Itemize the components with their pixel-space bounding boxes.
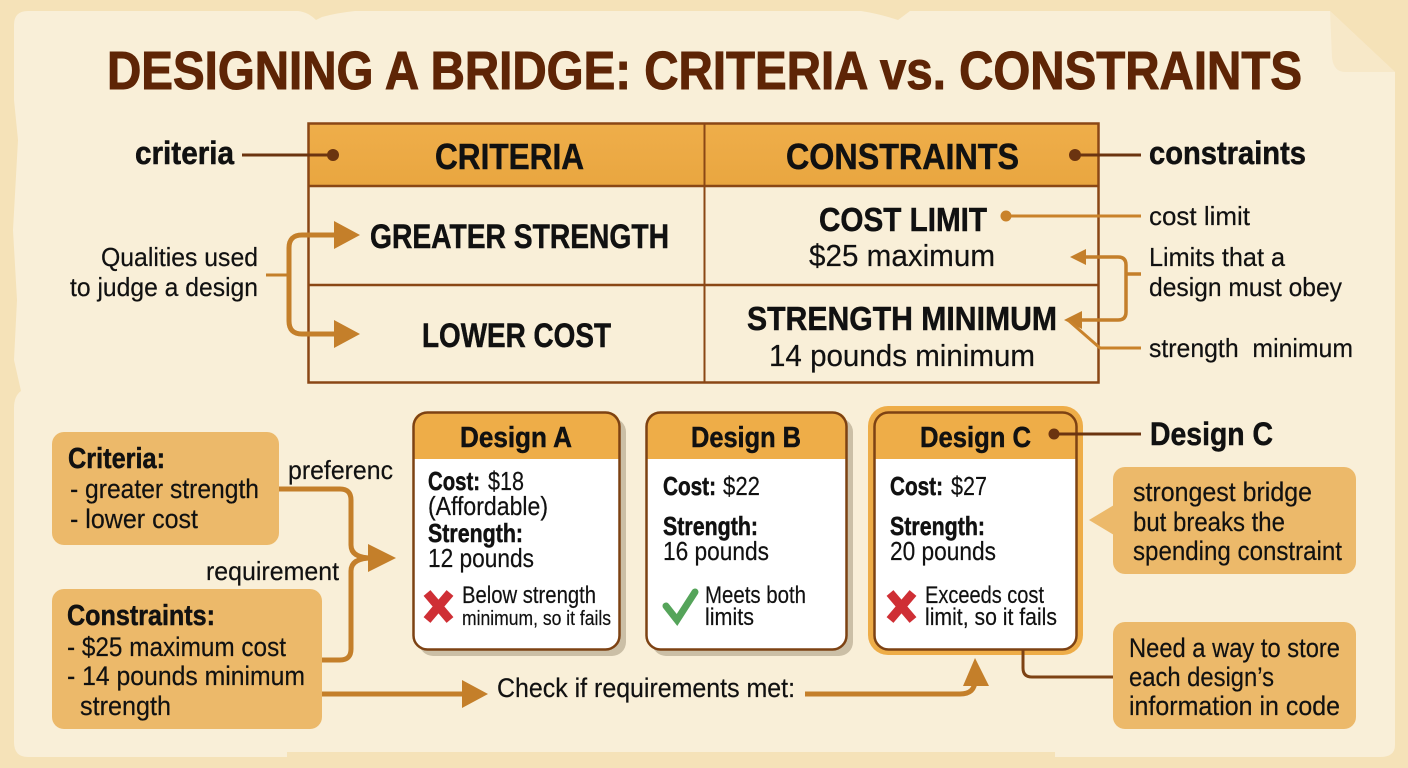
card: design A: minimum, so it fails bbox=[462, 608, 611, 630]
card: design C highlighted: Exceeds cost bbox=[925, 582, 1044, 609]
note: qualities used to judge a design bbox=[70, 242, 258, 302]
callout: store design information bbox=[1113, 622, 1356, 729]
panel: constraints summary: Constraints: bbox=[67, 600, 215, 632]
criterion: lower cost: LOWER COST bbox=[422, 317, 611, 355]
criterion: greater strength: GREATER STRENGTH bbox=[370, 218, 669, 256]
card: design A: 12 pounds bbox=[428, 543, 534, 573]
card: design C highlighted: limit, so it fails bbox=[925, 604, 1057, 631]
constraint: strength minimum: STRENGTH MINIMUM bbox=[747, 300, 1057, 337]
label: criteria: criteria bbox=[135, 135, 234, 171]
constraint value: 14 pounds minimum: 14 pounds minimum bbox=[769, 338, 1035, 373]
card: design B: Meets both bbox=[705, 582, 806, 609]
card: design A: (Affordable) bbox=[428, 491, 548, 521]
comparison table bbox=[308, 124, 1099, 383]
label: preferenc: preferenc bbox=[288, 455, 393, 485]
callout line: cost limit: cost limit bbox=[1149, 201, 1251, 231]
callout line: strength minimum: strength minimum bbox=[1149, 333, 1353, 363]
panel: criteria summary bbox=[52, 432, 279, 545]
table body bbox=[309, 186, 1099, 383]
callout: strongest bridge: but breaks the bbox=[1133, 507, 1285, 537]
table header band bbox=[309, 124, 1099, 186]
callout: store design information: each design’s bbox=[1129, 662, 1274, 692]
arrow: check to design C bbox=[805, 658, 989, 694]
arrow: bracket to criteria rows bbox=[266, 221, 360, 348]
label: design C bbox=[1048, 416, 1273, 452]
callout: strongest bridge: strongest bridge bbox=[1133, 477, 1312, 507]
page fold corner bbox=[1330, 11, 1395, 72]
note: qualities used to judge a design: to judge a design bbox=[70, 272, 258, 302]
panel: constraints summary bbox=[52, 589, 322, 729]
note: qualities used to judge a design: Qualities used bbox=[101, 242, 258, 272]
icon: red cross C bbox=[890, 593, 913, 620]
icon: red cross A bbox=[427, 593, 450, 620]
card: design B: Strength: bbox=[663, 511, 758, 541]
card: design C highlighted: Cost: bbox=[890, 471, 943, 501]
card: design B bbox=[646, 412, 853, 656]
constraint value: $25 maximum: $25 maximum bbox=[809, 238, 995, 273]
label: criteria bbox=[135, 135, 339, 171]
label: design C: Design C bbox=[1150, 416, 1273, 452]
label: constraints: constraints bbox=[1149, 135, 1306, 171]
card: design C highlighted: $27 bbox=[951, 471, 987, 501]
card: design A: Strength: bbox=[428, 518, 523, 548]
card: design B: 16 pounds bbox=[663, 536, 769, 566]
callout: strongest bridge bbox=[1089, 467, 1356, 574]
card: design C highlighted: Design C bbox=[920, 422, 1031, 454]
card: design C highlighted bbox=[868, 406, 1083, 655]
card: design B: Design B bbox=[691, 422, 801, 454]
card: design B: Cost: bbox=[663, 471, 716, 501]
card: design A: Cost: bbox=[428, 466, 480, 496]
callout line: cost limit bbox=[1000, 201, 1251, 231]
text: check if requirements met: Check if requirements met: bbox=[497, 673, 795, 703]
label: constraints bbox=[1069, 135, 1306, 171]
arrow: criteria and constraints into designs bbox=[279, 489, 396, 660]
card: design B: $22 bbox=[723, 471, 760, 501]
constraint: cost limit: COST LIMIT bbox=[819, 201, 987, 238]
card: design C highlighted: Strength: bbox=[890, 511, 985, 541]
panel: constraints summary: strength bbox=[80, 691, 171, 721]
card: design A: Design A bbox=[460, 422, 572, 454]
card: design A bbox=[413, 412, 626, 656]
callout: store design information: information in code bbox=[1129, 691, 1340, 721]
panel: criteria summary: - lower cost bbox=[70, 504, 198, 534]
card: design C highlighted: 20 pounds bbox=[890, 536, 996, 566]
callout: store design information: Need a way to store bbox=[1129, 633, 1340, 663]
card: design B: limits bbox=[705, 604, 754, 631]
arrow: bracket to constraint rows bbox=[1064, 249, 1141, 329]
arrow: constraints to check bbox=[322, 680, 488, 708]
header: criteria: CRITERIA bbox=[435, 136, 584, 177]
header: constraints: CONSTRAINTS bbox=[786, 136, 1019, 177]
card: design A: $18 bbox=[488, 466, 524, 496]
label: requirement: requirement bbox=[206, 556, 340, 586]
icon: green check B bbox=[666, 592, 695, 620]
note: limits that a design must obey: design must obey bbox=[1149, 272, 1342, 302]
note: limits that a design must obey: Limits that a bbox=[1149, 242, 1286, 272]
note: limits that a design must obey bbox=[1149, 242, 1342, 302]
callout line: strength minimum bbox=[1068, 320, 1353, 363]
panel: constraints summary: - $25 maximum cost bbox=[67, 632, 286, 662]
panel: constraints summary: - 14 pounds minimum bbox=[67, 661, 305, 691]
callout: strongest bridge: spending constraint bbox=[1133, 536, 1342, 566]
card: design A: Below strength bbox=[462, 582, 596, 609]
panel: criteria summary: - greater strength bbox=[70, 474, 259, 504]
connector: design C to storage note bbox=[1023, 650, 1113, 677]
panel: criteria summary: Criteria: bbox=[68, 443, 165, 475]
